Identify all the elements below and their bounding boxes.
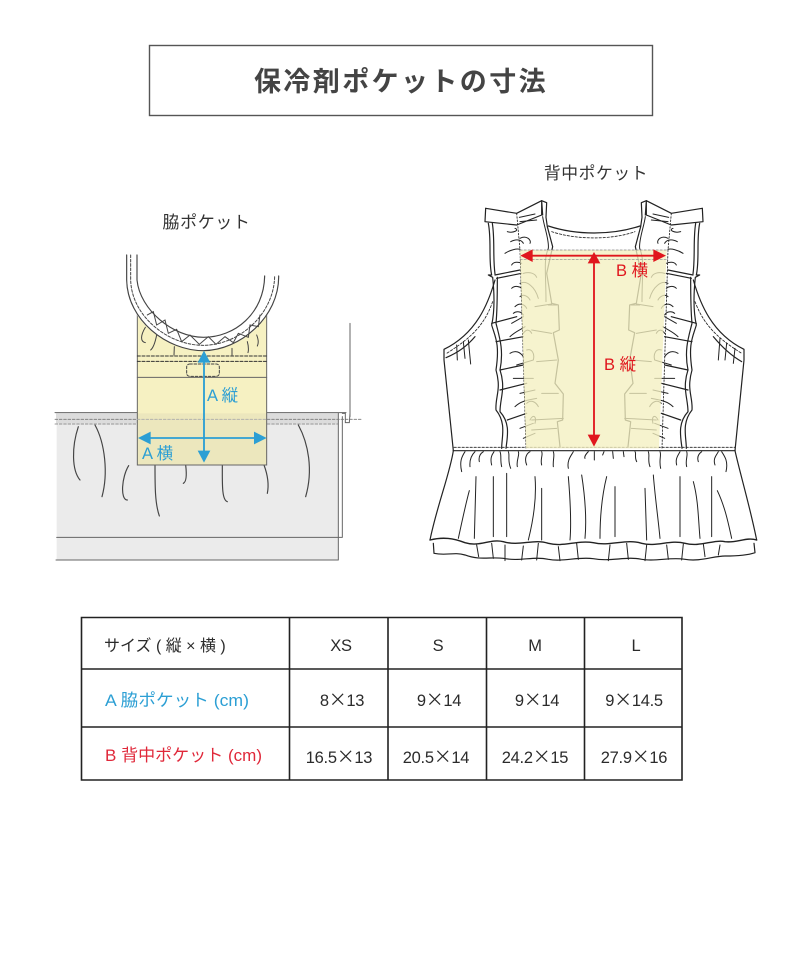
row B: 16.5×13: [306, 743, 372, 769]
row A: 9×14: [417, 686, 461, 712]
label: A vertical: A 縦: [207, 386, 239, 405]
row B: 24.2×15: [502, 743, 568, 769]
armhole binding: [127, 255, 279, 351]
diagram: back pocket: [430, 201, 757, 561]
arrow: B vertical: [588, 252, 600, 447]
row A: 9×14: [515, 686, 559, 712]
table grid: [82, 618, 682, 780]
title: 保冷剤ポケットの寸法: [254, 67, 548, 97]
heading: back pocket: 背中ポケット: [544, 164, 648, 183]
skirt panel: [55, 323, 363, 560]
header row: サイズ ( 縦 × 横 ): [104, 637, 226, 655]
row B: [105, 743, 667, 769]
label: B horizontal: B 横: [616, 261, 649, 280]
row A: 9×14.5: [605, 686, 663, 712]
header row: M: [528, 637, 542, 655]
size table: [82, 618, 682, 780]
diagram: side pocket: [55, 255, 363, 560]
row A: A 脇ポケット (cm): [105, 691, 249, 710]
row B: 27.9×16: [601, 743, 667, 769]
header row: [104, 637, 641, 655]
header row: S: [433, 637, 444, 655]
yellow pocket area: [520, 250, 667, 448]
arrow: A vertical: [198, 351, 210, 463]
yellow pocket area: [137, 310, 267, 465]
arrow: B horizontal: [520, 249, 666, 262]
row A: [105, 686, 663, 712]
header row: XS: [330, 637, 352, 655]
header row: L: [632, 637, 641, 655]
row A: 8×13: [320, 686, 364, 712]
left ruffle: [485, 201, 563, 448]
skirt gathers: [74, 425, 309, 516]
arrow: A horizontal: [138, 432, 267, 444]
row B: 20.5×14: [403, 743, 469, 769]
garment body: [430, 226, 757, 561]
row B: B 背中ポケット (cm): [105, 746, 262, 765]
label: A horizontal: A 横: [142, 444, 174, 463]
title: [150, 46, 652, 116]
right ruffle: [625, 201, 703, 448]
heading: side pocket: 脇ポケット: [162, 213, 250, 232]
label: B vertical: B 縦: [604, 355, 637, 374]
